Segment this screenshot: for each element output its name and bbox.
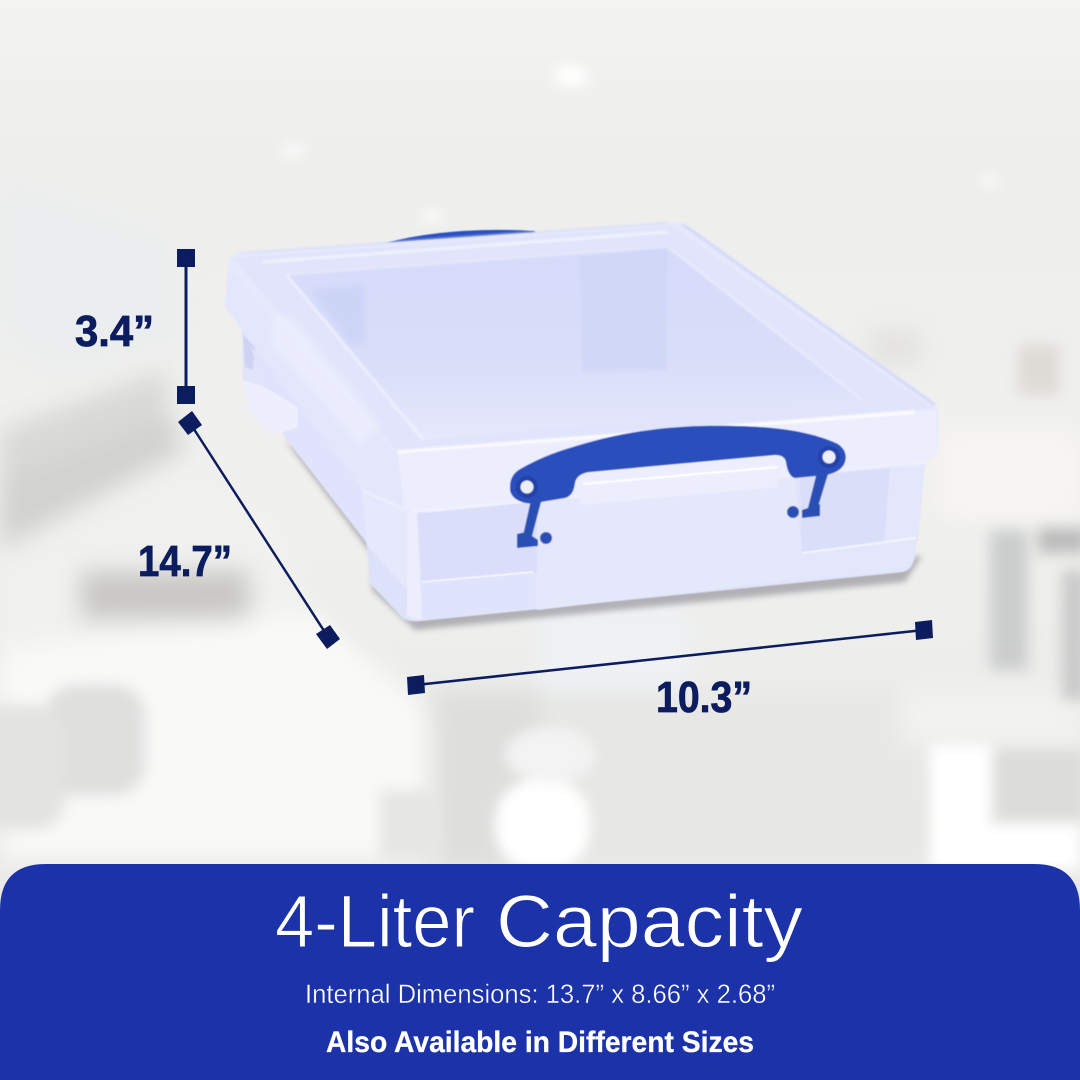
dimension: depth 14.7 inches: 14.7”	[138, 537, 232, 586]
availability note: Also Available in Different Sizes	[326, 1026, 754, 1059]
box lower body	[242, 330, 925, 621]
dimension: depth 14.7 inches	[138, 411, 340, 649]
panel: capacity	[0, 864, 1080, 1080]
heading: 4-Liter	[275, 880, 475, 963]
heading: Capacity	[496, 880, 803, 963]
lid side lobes	[272, 315, 380, 445]
dimension: width 10.3 inches	[407, 620, 933, 722]
lid rim highlights	[240, 223, 935, 512]
back handle	[385, 230, 535, 246]
dimension: width 10.3 inches: 10.3”	[656, 673, 752, 722]
blue carrying handle and clasps	[510, 426, 846, 548]
box soft shadow	[285, 440, 922, 630]
left clasp	[517, 500, 552, 548]
internal dimensions: Internal Dimensions: 13.7” x 8.66” x 2.68”	[305, 979, 775, 1009]
product: clear storage box	[225, 223, 938, 630]
box lid	[225, 223, 938, 513]
dimension: height 3.4 inches	[75, 249, 195, 404]
handle grip	[510, 426, 846, 503]
heading	[275, 880, 803, 963]
right clasp	[787, 472, 828, 518]
handle recess	[580, 465, 778, 505]
dimension: height 3.4 inches: 3.4”	[75, 307, 154, 356]
